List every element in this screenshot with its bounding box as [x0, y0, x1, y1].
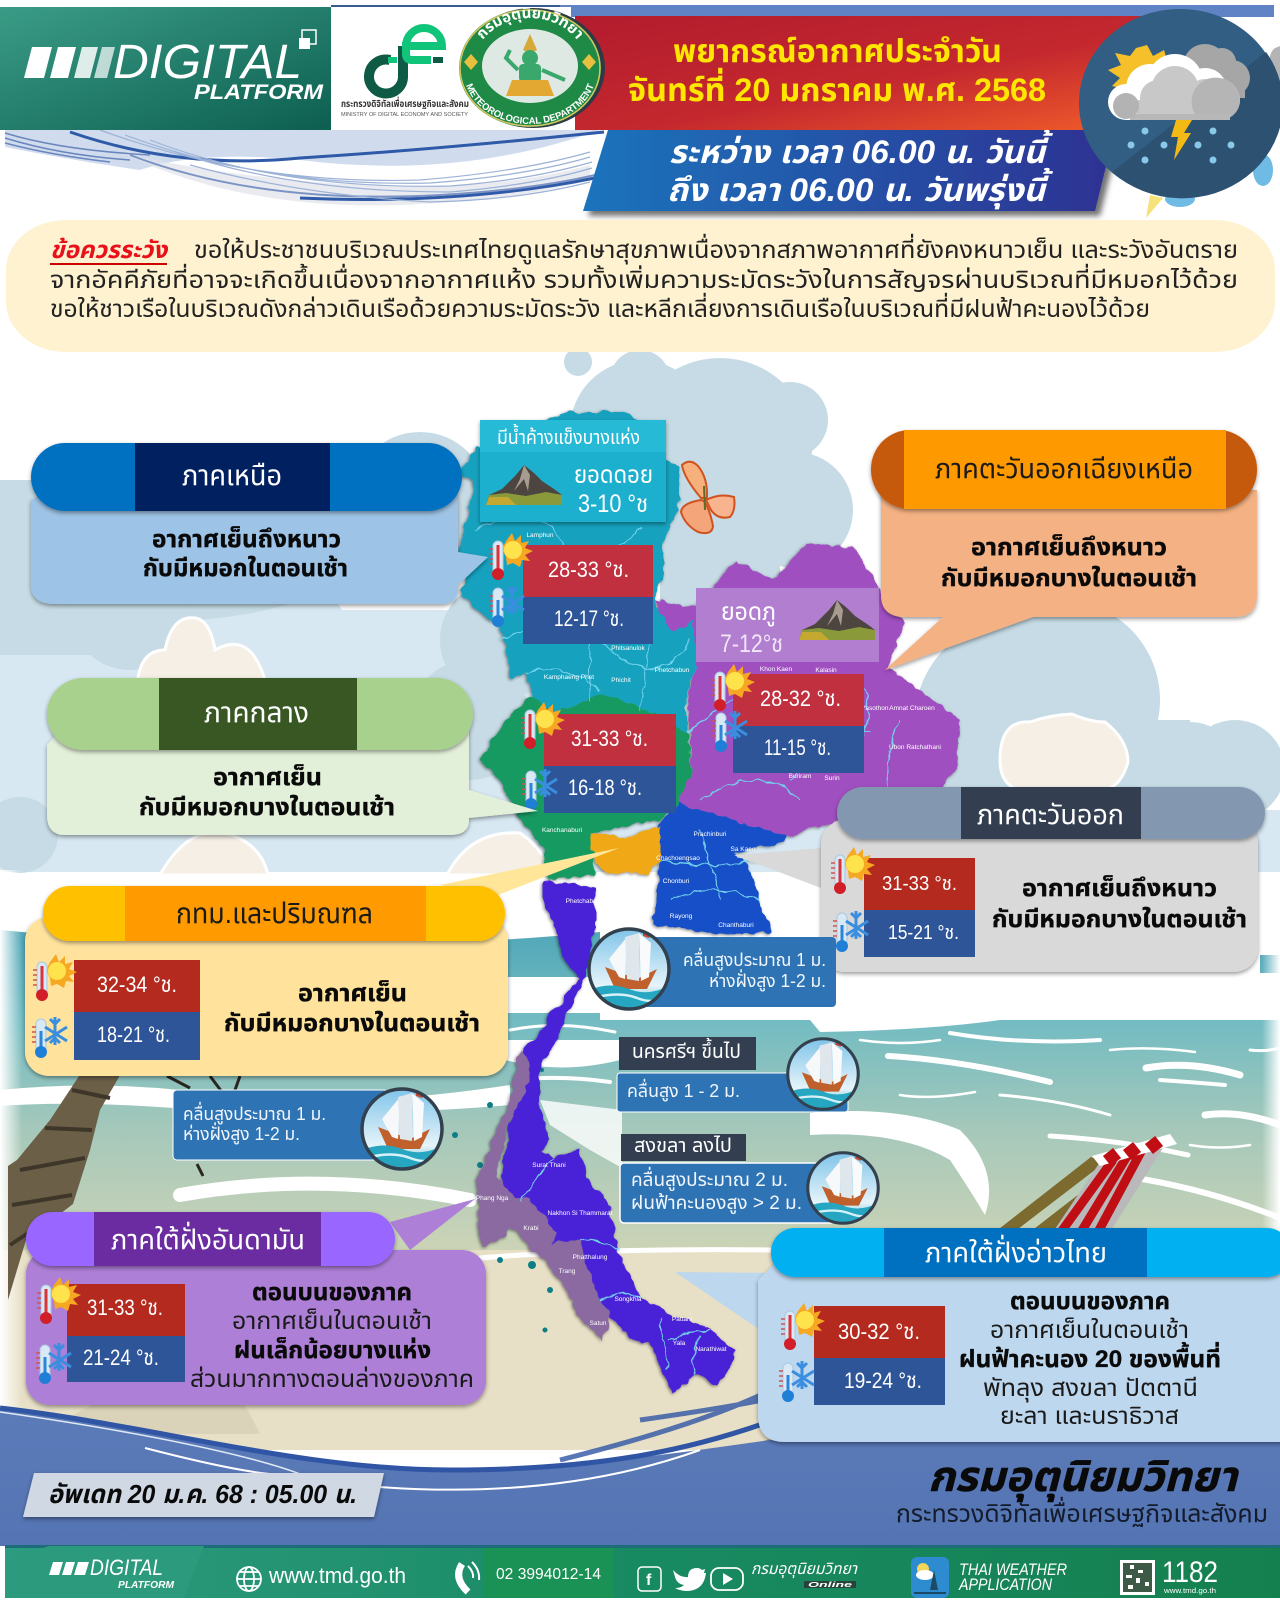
- agency name: [896, 1453, 1268, 1528]
- footer logo block: [6, 1546, 204, 1598]
- map: province labels: Trang: [559, 1268, 576, 1275]
- map: province labels: Phetchaburi: [566, 898, 600, 905]
- map: province labels: Phichit: [611, 677, 631, 684]
- panel: Andaman coast: [26, 1199, 486, 1405]
- caution line 2: จากอัคคีภัยที่อาจจะเกิดขึ้นเนื่องจากอากาศแห้ง รวมทั้งเพิ่มความระมัดระวังในการสัญจรผ่านบริเวณที่มีหมอกไว้ด้วย: [50, 263, 1238, 294]
- east forecast line 2: กับมีหมอกบางในตอนเช้า: [992, 905, 1247, 933]
- wave text line 2: ห่างฝั่งสูง 1-2 ม.: [183, 1122, 300, 1146]
- map: province labels: Nakhon Si Thammarat: [548, 1210, 613, 1217]
- app label line 2: APPLICATION: [958, 1575, 1053, 1594]
- map: province labels: Phitsanulok: [611, 645, 646, 652]
- app label line 1: THAI WEATHER: [959, 1560, 1067, 1579]
- Andaman low: 21-24 °ช.: [83, 1345, 159, 1370]
- Gulf high: 30-32 °ช.: [838, 1319, 920, 1344]
- logo bars: [24, 47, 115, 78]
- map: province labels: Songkhla: [614, 1296, 642, 1303]
- central forecast line 2: กับมีหมอกบางในตอนเช้า: [139, 793, 395, 821]
- illustration: beach chair: [995, 1134, 1177, 1232]
- map: province labels: Buriram: [789, 773, 811, 780]
- wave text line 1: คลื่นสูงประมาณ 1 ม.: [683, 947, 826, 972]
- icon: youtube: [711, 1568, 743, 1590]
- icon: central thermometer cold: [522, 769, 557, 810]
- map: province labels: Yala: [673, 1340, 686, 1347]
- area label: นครศรีฯ ขึ้นไป: [632, 1037, 741, 1063]
- title line 1: พยากรณ์อากาศประจำวัน: [673, 33, 1002, 69]
- caution heading: ข้อควรระวัง: [50, 237, 168, 264]
- northeast forecast line 1: อากาศเย็นถึงหนาว: [971, 533, 1167, 561]
- map: province labels: Chonburi: [663, 878, 689, 885]
- Andaman high: 31-33 °ช.: [87, 1295, 163, 1320]
- north high: 28-33 °ช.: [548, 557, 629, 582]
- Andaman forecast line 4: ส่วนมากทางตอนล่างของภาค: [190, 1365, 474, 1393]
- Gulf forecast line 5: ยะลา และนราธิวาส: [1000, 1403, 1179, 1430]
- map of Thailand: [459, 412, 960, 1393]
- title line 2: จันทร์ที่ 20 มกราคม พ.ศ. 2568: [628, 67, 1046, 108]
- peak temperature: 7-12°ช: [720, 630, 783, 658]
- Gulf forecast line 2: อากาศเย็นในตอนเช้า: [990, 1316, 1189, 1344]
- phone number: 02 3994012-14: [496, 1566, 601, 1583]
- timestamp text: อัพเดท 20 ม.ค. 68 : 05.00 น.: [48, 1479, 357, 1509]
- header: red title bar: [575, 16, 1175, 130]
- map: province labels: Chachoengsao: [656, 855, 700, 862]
- ministry name english: MINISTRY OF DIGITAL ECONOMY AND SOCIETY: [341, 112, 468, 118]
- icon: ship: [587, 927, 671, 1011]
- map: province labels: Yasothon: [862, 705, 889, 712]
- east temperature block: [864, 858, 975, 957]
- icon: ship: [786, 1037, 860, 1111]
- Gulf heading: ภาคใต้ฝั่งอ่าวไทย: [925, 1234, 1107, 1268]
- ministry name: กระทรวงดิจิทัลเพื่อเศรษฐกิจและสังคม: [341, 96, 469, 110]
- Bangkok low: 18-21 °ช.: [97, 1022, 170, 1047]
- Bangkok forecast line 1: อากาศเย็น: [298, 980, 407, 1007]
- icon: east thermometer hot: [831, 847, 875, 894]
- background: sea and beach: [0, 870, 1280, 1450]
- map: province labels: Sa Kaeo: [731, 846, 756, 853]
- frost heading: มีน้ำค้างแข็งบางแห่ง: [497, 423, 640, 449]
- icon: QR code: [1120, 1560, 1155, 1595]
- icon: east thermometer cold: [833, 911, 868, 952]
- wave text line 1: คลื่นสูงประมาณ 1 ม.: [183, 1101, 326, 1126]
- east heading: ภาคตะวันออก: [977, 799, 1124, 830]
- map: province labels: Surat Thani: [532, 1162, 566, 1169]
- map: province labels: Kalasin: [815, 667, 837, 674]
- Gulf temperature block: [814, 1306, 945, 1405]
- Gulf forecast line 4: พัทลุง สงขลา ปัตตานี: [983, 1375, 1198, 1403]
- background: bottom blue swoosh: [0, 1370, 1280, 1546]
- illustration: palm trunk: [8, 1070, 240, 1300]
- icon: mountain: [486, 465, 562, 505]
- east low: 15-21 °ช.: [888, 922, 959, 944]
- map region: Bangkok: [590, 826, 660, 873]
- update timestamp: [23, 1473, 384, 1517]
- icon: Gulf thermometer hot: [781, 1303, 825, 1350]
- northeast low: 11-15 °ช.: [764, 735, 831, 760]
- ministry symbol: [369, 28, 443, 94]
- wave text line 2: ห่างฝั่งสูง 1-2 ม.: [709, 969, 826, 993]
- panel: Gulf of Thailand coast: [675, 1228, 1280, 1442]
- map: province labels: Narathiwat: [695, 1346, 727, 1353]
- icon: north thermometer hot: [489, 533, 533, 580]
- caution line 3: ขอให้ชาวเรือในบริเวณดังกล่าวเดินเรือด้วยความระมัดระวัง และหลีกเลี่ยงการเดินเรือในบริเวณที่มีฝนฟ้าคะนองไว้ด้วย: [50, 292, 1150, 323]
- map: province labels: Khon Kaen: [760, 666, 792, 673]
- caution line 1: ขอให้ประชาชนบริเวณประเทศไทยดูแลรักษาสุขภาพเนื่องจากสภาพอากาศที่ยังคงหนาวเย็น และระวังอันตราย: [194, 233, 1238, 265]
- map region: south andaman: [477, 1050, 612, 1340]
- map: province labels: Ubon Ratchathani: [889, 744, 941, 751]
- map: province labels: Surin: [824, 775, 840, 782]
- central forecast line 1: อากาศเย็น: [213, 764, 322, 791]
- panel: caution notice: [6, 220, 1275, 352]
- map region: east: [653, 803, 788, 934]
- temperature: northeast: [733, 674, 864, 773]
- icon: twitter: [673, 1568, 706, 1591]
- wave text line 2: ฝนฟ้าคะนองสูง > 2 ม.: [631, 1193, 802, 1215]
- northeast forecast line 2: กับมีหมอกบางในตอนเช้า: [941, 564, 1197, 592]
- panel: time range bar: [583, 129, 1115, 211]
- icon: weather background accents: [1146, 46, 1280, 218]
- map: province labels: Prachinburi: [694, 831, 726, 838]
- panel: Bangkok and vicinity: [25, 848, 619, 1076]
- department title: กรมอุตุนิยมวิทยา: [928, 1453, 1240, 1502]
- map region: northeast: [655, 543, 960, 837]
- sea box: Andaman waves: [173, 1087, 444, 1171]
- icon: butterfly: [681, 462, 734, 533]
- area label: สงขลา ลงไป: [634, 1135, 732, 1157]
- Andaman forecast line 2: อากาศเย็นในตอนเช้า: [232, 1307, 432, 1335]
- logo subtitle: PLATFORM: [194, 81, 324, 104]
- Bangkok heading: กทม.และปริมณฑล: [176, 898, 373, 930]
- map: province labels: Lamphun: [526, 532, 554, 539]
- map: province labels: Satun: [590, 1320, 607, 1327]
- north forecast line 2: กับมีหมอกในตอนเช้า: [143, 554, 348, 582]
- hotline url: www.tmd.go.th: [1163, 1588, 1216, 1595]
- decorative swoosh under header: [5, 130, 604, 205]
- map region: central: [480, 693, 691, 880]
- Andaman heading: ภาคใต้ฝั่งอันดามัน: [111, 1221, 305, 1255]
- icon: app: [911, 1557, 949, 1598]
- Bangkok forecast line 2: กับมีหมอกบางในตอนเช้า: [224, 1009, 480, 1037]
- peak temperature: 3-10 °ช: [578, 490, 648, 518]
- temperature: north: [523, 545, 653, 644]
- map: province labels: Kanchanaburi: [542, 827, 582, 834]
- icon: Andaman thermometer hot: [37, 1277, 81, 1324]
- temperature: central: [544, 714, 676, 813]
- footer logo word: DIGITAL: [90, 1555, 163, 1580]
- icon: weather storm cloud: [1079, 9, 1280, 198]
- icon: meteorological department seal: [459, 8, 605, 128]
- ministry title: กระทรวงดิจิทัลเพื่อเศรษฐกิจและสังคม: [896, 1496, 1268, 1528]
- sea box: Nakhon Si Thammarat northward: [617, 1037, 860, 1112]
- sea box: upper gulf waves: [587, 927, 836, 1011]
- wave text: คลื่นสูง 1 - 2 ม.: [627, 1078, 740, 1103]
- peak label: ยอดภู: [721, 598, 776, 627]
- Andaman forecast line 3: ฝนเล็กน้อยบางแห่ง: [234, 1336, 431, 1364]
- Gulf low: 19-24 °ช.: [844, 1368, 922, 1393]
- icon: facebook: f: [646, 1572, 652, 1589]
- icon: ship: [360, 1087, 444, 1171]
- map: province labels: Phang Nga: [476, 1195, 509, 1202]
- north forecast line 1: อากาศเย็นถึงหนาว: [152, 525, 341, 553]
- northeast heading: ภาคตะวันออกเฉียงเหนือ: [935, 453, 1193, 484]
- header: ministry logo box: [331, 7, 571, 130]
- map: province labels: Phatthalung: [573, 1254, 608, 1261]
- north low: 12-17 °ช.: [554, 606, 624, 631]
- panel: north region: [31, 443, 488, 604]
- footer department: กรมอุตุนิยมวิทยา: [751, 1561, 858, 1579]
- icon: mountain: [799, 600, 875, 640]
- icon: facebook: [638, 1567, 661, 1591]
- time range line 2: ถึง เวลา 06.00 น. วันพรุ่งนี้: [667, 167, 1053, 210]
- icon: northeast thermometer hot: [711, 664, 755, 711]
- Andaman temperature block: [67, 1284, 185, 1382]
- northeast high: 28-32 °ช.: [760, 686, 841, 711]
- logo wordmark: DIGITAL: [113, 36, 302, 89]
- panel: east region: [734, 787, 1265, 972]
- map: province labels: Amnat Charoen: [889, 705, 935, 712]
- seal text top: กรมอุตุนิยมวิทยา: [478, 8, 582, 40]
- map: province labels: [476, 532, 941, 1353]
- map: province labels: Pattani: [672, 1316, 692, 1323]
- east forecast line 1: อากาศเย็นถึงหนาว: [1022, 874, 1217, 902]
- online label: Online: [808, 1582, 852, 1589]
- central heading: ภาคกลาง: [204, 697, 309, 729]
- sea box: Songkhla southward: [620, 1134, 880, 1225]
- footer logo subword: PLATFORM: [118, 1580, 175, 1591]
- central low: 16-18 °ช.: [568, 775, 642, 800]
- icon: globe: [237, 1567, 261, 1591]
- icon: phone: [459, 1562, 479, 1592]
- panel: northeast peak: [696, 588, 879, 662]
- Andaman forecast line 1: ตอนบนของภาค: [252, 1279, 412, 1306]
- time range line 1: ระหว่าง เวลา 06.00 น. วันนี้: [669, 129, 1053, 170]
- panel: frost notice: [480, 420, 666, 522]
- north heading: ภาคเหนือ: [182, 460, 282, 492]
- online label: [804, 1581, 856, 1589]
- icon: central thermometer hot: [521, 702, 565, 749]
- central high: 31-33 °ช.: [571, 726, 648, 751]
- wave text line 1: คลื่นสูงประมาณ 2 ม.: [631, 1166, 788, 1192]
- panel: northeast region: [871, 430, 1257, 670]
- east high: 31-33 °ช.: [882, 873, 957, 895]
- Bangkok high: 32-34 °ช.: [97, 972, 177, 997]
- seal text bottom: METEOROLOGICAL DEPARTMENT: [466, 82, 594, 124]
- hotline: 1182: [1162, 1556, 1218, 1589]
- icon: Gulf thermometer cold: [779, 1361, 814, 1402]
- map: province labels: Rayong: [670, 913, 693, 920]
- icon: northeast thermometer cold: [712, 711, 747, 752]
- website: www.tmd.go.th: [268, 1563, 406, 1588]
- map: province labels: Kamphaeng Phet: [544, 674, 594, 681]
- icon: Bangkok thermometer hot: [33, 954, 77, 1001]
- map: province labels: Chanthaburi: [718, 922, 754, 929]
- map: province labels: Krabi: [523, 1225, 539, 1232]
- panel: central region: [47, 678, 538, 835]
- icon: Bangkok thermometer cold: [32, 1017, 67, 1058]
- header: digital platform logo: [0, 7, 331, 130]
- icon: ship: [806, 1151, 880, 1225]
- map region: south gulf: [500, 880, 735, 1393]
- map region: north: [459, 412, 696, 733]
- map: province labels: Phetchabun: [655, 667, 690, 674]
- Gulf forecast line 1: ตอนบนของภาค: [1010, 1288, 1170, 1315]
- Gulf forecast line 3: ฝนฟ้าคะนอง 20 ของพื้นที่: [959, 1342, 1221, 1373]
- icon: north thermometer cold: [489, 586, 524, 627]
- peak label: ยอดดอย: [574, 461, 653, 489]
- icon: Andaman thermometer cold: [36, 1343, 71, 1384]
- Bangkok temperature block: [74, 960, 200, 1060]
- footer bar: [5, 1545, 1280, 1598]
- panel: header top stripe: [331, 5, 1274, 17]
